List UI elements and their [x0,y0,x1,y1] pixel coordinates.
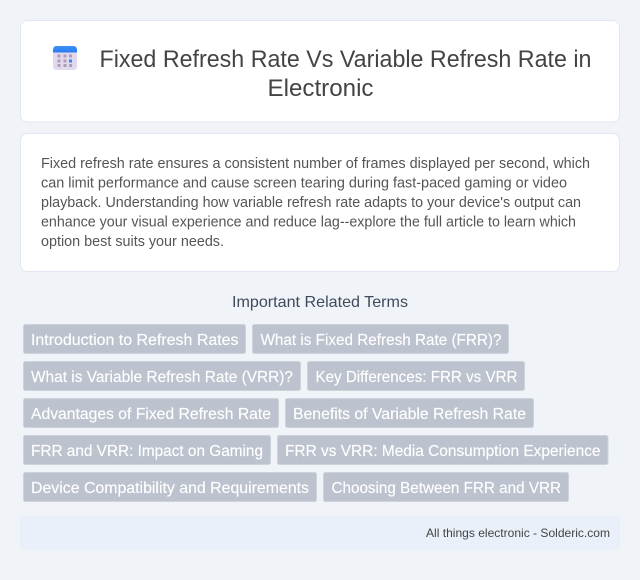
footer [20,516,620,550]
tag: key differences: Key Differences: FRR vs VRR [316,369,518,386]
tag: device compatibility: Device Compatibility and Requirements [31,480,309,497]
heading: important related terms: Important Related Terms [232,294,408,311]
tag: device compatibility [24,472,316,502]
tag: key differences [308,362,524,390]
tag: media consumption: FRR vs VRR: Media Consumption Experience [285,443,601,460]
panel: title header [20,20,620,122]
tag: introduction [24,324,246,354]
tag: what is FRR [252,324,508,354]
tag: impact on gaming: FRR and VRR: Impact on Gaming [31,443,263,460]
text block: description: option best suits your needs. [41,234,224,250]
tag: choosing between: Choosing Between FRR and VRR [332,480,561,497]
tag list [24,324,608,502]
tag: advantages of FRR: Advantages of Fixed Refresh Rate [31,406,271,423]
tag: benefits of VRR [286,398,534,428]
footer credit: All things electronic - Solderic.com [426,526,610,540]
tag: what is VRR: What is Variable Refresh Rate (VRR)? [31,369,293,386]
tag: what is VRR [24,362,300,390]
title [100,46,592,102]
tag: media consumption [278,436,608,464]
tag: choosing between [324,472,568,502]
panel: description [20,134,620,272]
text block: description: can limit performance and cause screen tearing during fast-paced gaming or video [41,176,567,192]
icon: calendar app [53,46,77,70]
text block: description: enhance your visual experience and reduce lag--explore the full article to learn which [41,214,576,230]
tag: benefits of VRR: Benefits of Variable Refresh Rate [293,406,526,423]
tag: what is FRR: What is Fixed Refresh Rate (FRR)? [260,332,502,349]
title: Electronic [268,75,374,102]
tag: advantages of FRR [24,398,278,428]
tag: impact on gaming [24,436,270,464]
text block: description: Fixed refresh rate ensures a consistent number of frames displayed per second, which [41,156,590,172]
title: Fixed Refresh Rate Vs Variable Refresh Rate in [100,46,592,73]
text block: description [41,156,590,250]
tag: introduction: Introduction to Refresh Rates [31,332,238,349]
text block: description: playback. Understanding how variable refresh rate adapts to your device's output can [41,195,581,211]
